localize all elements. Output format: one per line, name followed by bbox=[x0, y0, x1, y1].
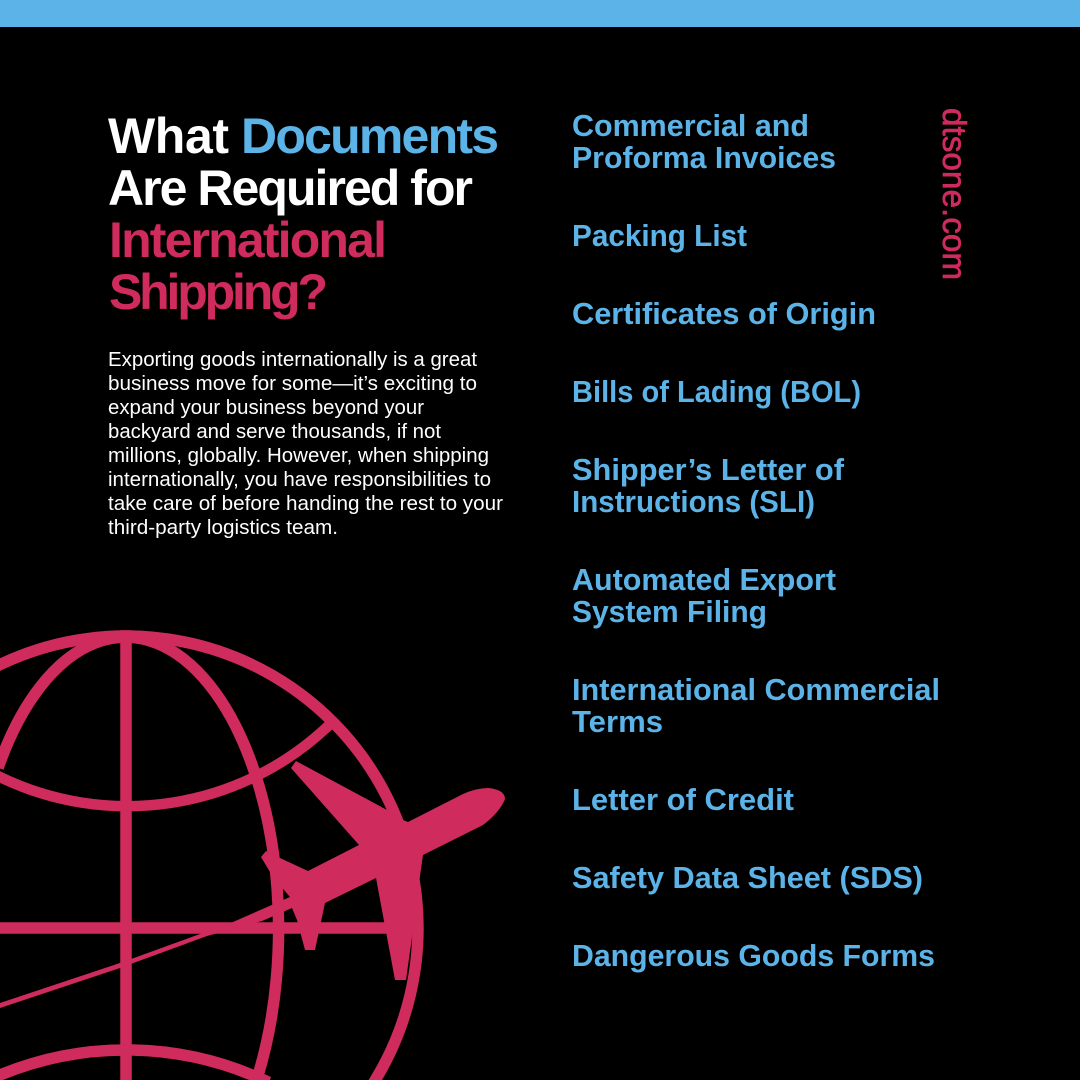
list item: commercial and proforma invoices bbox=[572, 108, 836, 175]
title: Documents bbox=[241, 108, 499, 164]
list item: dangerous goods forms: Dangerous Goods Forms bbox=[572, 938, 935, 973]
intro paragraph: take care of before handing the rest to your bbox=[108, 493, 503, 515]
intro paragraph: third-party logistics team. bbox=[108, 517, 338, 539]
list item: international commercial terms: Terms bbox=[572, 704, 663, 739]
title: International bbox=[109, 212, 387, 268]
title: Shipping? bbox=[109, 264, 328, 320]
intro paragraph: millions, globally. However, when shipping bbox=[108, 445, 489, 467]
list item: international commercial terms: International Commercial bbox=[572, 672, 940, 707]
list item: automated export system filing bbox=[572, 562, 836, 629]
list item: automated export system filing: System Filing bbox=[572, 594, 767, 629]
list item: packing list: Packing List bbox=[572, 218, 747, 253]
list item: certificates of origin: Certificates of Origin bbox=[572, 296, 876, 331]
website label: dtsone.com: dtsone.com bbox=[935, 108, 972, 280]
intro paragraph: expand your business beyond your bbox=[108, 397, 424, 419]
title bbox=[108, 108, 499, 320]
list item: safety data sheet: Safety Data Sheet (SDS) bbox=[572, 860, 923, 895]
list item: automated export system filing: Automated Export bbox=[572, 562, 836, 597]
list item: commercial and proforma invoices: Proforma Invoices bbox=[572, 140, 836, 175]
intro paragraph: internationally, you have responsibilities to bbox=[108, 469, 491, 491]
intro paragraph: business move for some—it’s exciting to bbox=[108, 373, 477, 395]
icon: airplane with trail bbox=[0, 761, 505, 1008]
list item: letter of credit: Letter of Credit bbox=[572, 782, 794, 817]
list: required documents bbox=[572, 108, 940, 973]
list item: shipper's letter of instructions: Shipper’s Letter of bbox=[572, 452, 845, 487]
intro paragraph bbox=[108, 349, 503, 539]
top accent bar bbox=[0, 0, 1080, 27]
intro paragraph: Exporting goods internationally is a great bbox=[108, 349, 477, 371]
list item: commercial and proforma invoices: Commercial and bbox=[572, 108, 809, 143]
globe and airplane illustration bbox=[0, 636, 505, 1080]
list item: bills of lading: Bills of Lading (BOL) bbox=[572, 374, 861, 409]
list item: shipper's letter of instructions: Instructions (SLI) bbox=[572, 484, 815, 519]
intro paragraph: backyard and serve thousands, if not bbox=[108, 421, 441, 443]
title: What bbox=[108, 108, 229, 164]
icon: globe bbox=[0, 636, 418, 1080]
list item: international commercial terms bbox=[572, 672, 940, 739]
list item: shipper's letter of instructions bbox=[572, 452, 845, 519]
title: Are Required for bbox=[108, 160, 473, 216]
